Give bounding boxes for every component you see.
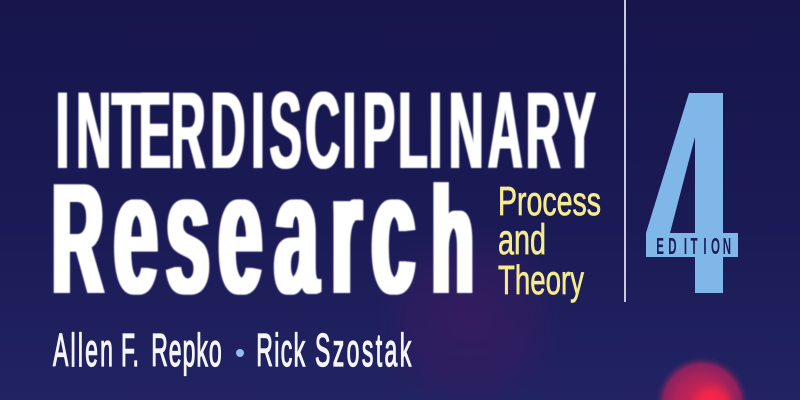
- subtitle: Process and Theory: Process: [498, 178, 601, 224]
- bullet separator: [236, 349, 244, 357]
- edition label: EDITION: [656, 234, 731, 259]
- title: Research: h: [432, 156, 474, 327]
- subtitle: Process and Theory: Theory: [498, 257, 584, 303]
- glow: red bokeh core: [686, 378, 738, 400]
- subtitle: Process and Theory: [498, 178, 601, 303]
- authors: [53, 324, 414, 376]
- subtitle: Process and Theory: and: [498, 216, 546, 264]
- glow: purple bokeh: [365, 215, 575, 400]
- author: Rick Szostak: Szostak: [315, 324, 414, 376]
- edition numeral 4: [646, 93, 738, 293]
- glow: red bokeh: [650, 352, 754, 400]
- title: Research: esearc: [114, 136, 415, 330]
- vertical divider: [624, 0, 626, 302]
- author: Allen F. Repko: [53, 324, 223, 376]
- author: Rick Szostak: Rick: [256, 324, 314, 376]
- title: Interdisciplinary: INTERDISCIPLINARY: [56, 70, 596, 193]
- title: Research: R: [52, 150, 103, 327]
- author: Rick Szostak: [256, 324, 414, 376]
- author: Allen F. Repko: F.: [121, 324, 145, 376]
- author: Allen F. Repko: Repko: [151, 324, 223, 376]
- author: Allen F. Repko: Allen: [53, 324, 124, 376]
